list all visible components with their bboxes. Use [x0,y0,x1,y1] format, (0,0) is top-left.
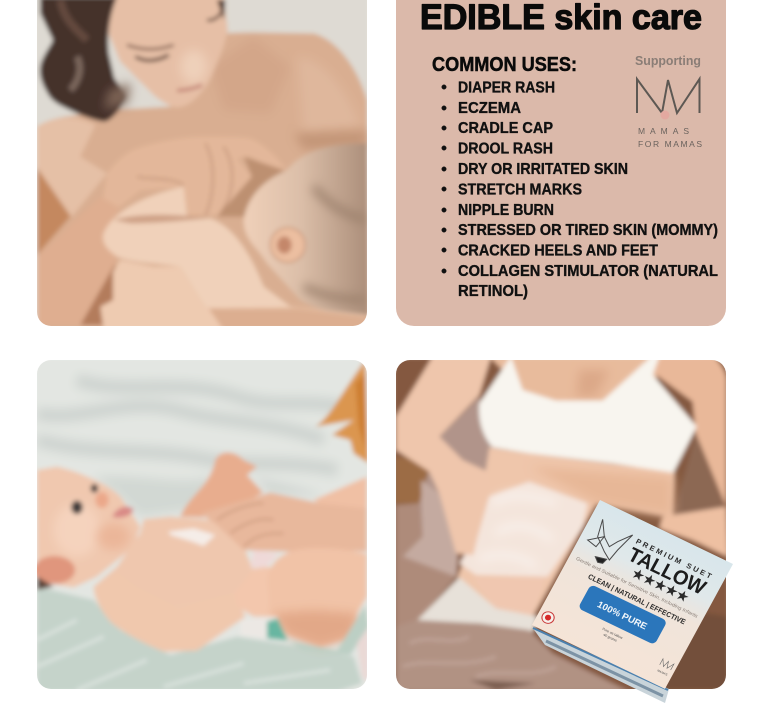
mother's hand on baby [106,138,280,213]
baby eyes [71,501,83,514]
bra [479,357,697,473]
underwear [416,577,538,632]
tagline: Gentle and Suitable for Sensitive Skin, Including Infants [575,556,699,620]
box front face: MAMAS [656,668,668,677]
panel background [396,0,726,326]
lower belly shade [473,577,546,615]
brand name: PREMIUM SUET [634,537,714,581]
list of uses: CRACKED HEELS AND FEET [458,242,658,260]
left arm and hand [396,357,491,555]
box base side [532,627,669,703]
list of uses: COLLAGEN STIMULATOR (NATURAL [458,263,718,280]
box front face: 40 grams [603,633,618,643]
green blanket [37,587,362,692]
baby head [244,143,369,315]
blue pure badge [578,584,667,645]
list of uses: CRADLE CAP [458,120,553,137]
shadow beside baby head [218,157,284,218]
adult back leg [314,477,367,508]
panel: pregnant belly photo [393,357,729,693]
box front face: CLEAN | NATURAL | EFFECTIVE [586,572,687,626]
blanket [396,620,629,692]
list of uses: RETINOL) [458,283,528,300]
list of uses: STRETCH MARKS [458,182,582,198]
baby hand [234,567,275,617]
icon: Mamas for Mamas logo [637,79,702,149]
cream on chest [169,528,215,546]
box front face [532,500,733,689]
icon: red maple leaf seal [540,610,556,625]
forearm [104,203,111,209]
diaper [244,614,279,634]
belly [458,447,674,617]
baby head [37,467,140,587]
cream on belly [459,482,588,577]
list of uses: NIPPLE BURN [458,202,554,219]
orange hair [315,360,369,463]
sub-heading: COMMON USES: [432,54,577,76]
photo background [34,0,370,330]
adult hand [200,493,367,552]
icon: Mamas for Mamas logo: MAMAS [638,126,689,136]
shaded upper arm [37,168,70,255]
mother's lower hand [100,260,367,330]
list of uses: ECZEMA [458,100,521,117]
right upper arm [654,357,726,507]
mother's shoulder and chest [37,33,370,330]
baby torso [94,517,254,607]
list of uses: DIAPER RASH [458,80,555,96]
supporting label: Supporting [635,53,701,68]
icon: bull head [588,519,633,563]
mother's face [109,0,228,107]
list of uses: DROOL RASH [458,140,553,158]
baby nose [95,492,109,508]
raised foot [180,452,263,517]
baby arm [92,585,246,654]
baby arm and shoulder [103,187,290,308]
size note: Pure as tallow [601,627,624,640]
baby thigh [267,548,367,647]
right forearm [659,507,728,557]
box front face: TALLOW [624,544,710,600]
diaper top [252,552,274,567]
product box: premium suet tallow [532,500,733,703]
mother's left shoulder [37,118,107,217]
white bed sheet [34,357,370,693]
panel: baby on blanket photo [34,357,370,693]
mini logo [660,659,674,670]
cleavage skin [490,360,659,404]
mother's dark hair [40,0,126,122]
baby ear [34,556,75,584]
baby tongue [112,507,134,518]
panel: mother holding baby photo [34,0,370,330]
list of uses: STRESSED OR TIRED SKIN (MOMMY) [458,222,718,239]
list of uses: DRY OR IRRITATED SKIN [458,161,628,178]
panel: common uses [396,0,726,326]
brown background [393,357,729,693]
list of uses [442,80,718,300]
baby ear [270,228,305,262]
icon: Mamas for Mamas logo: FOR MAMAS [638,139,702,149]
stars: ★★★★★ [628,566,692,607]
pillow and sheet [419,397,493,540]
box front face: 100% PURE [596,599,649,631]
